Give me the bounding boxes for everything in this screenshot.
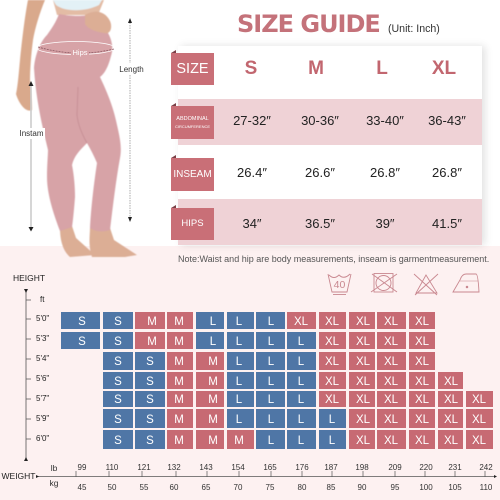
weight axis: 95 [391,483,400,492]
label: inseam [171,158,214,191]
unit note: (Unit: Inch) [388,23,440,35]
weight axis: 85 [327,483,336,492]
row 5'9": XL [444,414,459,426]
label: abdominal circumference: CIRCUMFERENCE [175,124,210,129]
hips measure [37,42,115,57]
row 6'0": XL [356,435,371,447]
height axis: 5'4" [36,354,49,363]
label: inseam: INSEAM [173,169,212,180]
row values: abdominal [233,113,466,128]
height axis [13,273,49,461]
weight axis: 165 [263,463,277,472]
weight axis: 242 [479,463,493,472]
row band: abdominal [178,99,482,145]
weight axis: 105 [448,483,462,492]
row 5'3": L [236,336,243,348]
row 5'9": L [236,414,243,426]
row 5'7": XL [472,394,487,406]
row 5'7": XL [325,394,340,406]
row 5'7": S [114,394,122,406]
row 5'0": XL [356,316,371,328]
row values: inseam: 26.4″ [237,165,267,180]
weight axis: 75 [266,483,275,492]
row 6'0": S [146,435,154,447]
row 5'9": M [174,414,184,426]
weight axis: 45 [78,483,87,492]
weight axis: 176 [295,463,309,472]
row 6'0": S [114,435,122,447]
weight axis: kg [50,478,59,488]
icon: iron [453,274,479,292]
label: hips: HIPS [181,218,204,229]
row 5'4": XL [384,356,399,368]
row 5'3": L [298,336,305,348]
row 5'6" [103,372,463,389]
row 5'7": XL [384,394,399,406]
hand [85,12,111,33]
label: size [171,53,214,85]
row 5'3": M [147,336,157,348]
row 5'4": XL [325,356,340,368]
height axis: 5'7" [36,394,49,403]
row 5'3": XL [415,336,430,348]
weight axis: 80 [298,483,307,492]
weight axis: 231 [448,463,462,472]
row 5'9": L [298,414,305,426]
row 5'0": L [268,316,275,328]
weight axis: 99 [78,463,87,472]
height axis: 5'9" [36,414,49,423]
row 6'0" [103,430,493,449]
icon: wash 40 [328,274,351,294]
row 5'9": S [146,414,154,426]
skin: torso [53,0,104,15]
size headers: L [376,58,388,79]
weight axis: 143 [199,463,213,472]
row 5'6": L [236,376,243,388]
size headers [245,58,456,79]
title: SIZE GUIDE [237,10,380,38]
row 5'4": XL [356,356,371,368]
row 5'6": M [208,376,218,388]
row 5'3": XL [384,336,399,348]
weight axis: 50 [108,483,117,492]
weight axis: 110 [480,483,493,492]
weight axis: 55 [140,483,149,492]
skin: arm [16,0,45,111]
row 5'9" [103,409,493,428]
row 6'0": M [208,435,218,447]
top [53,0,102,10]
row 5'7": L [236,394,243,406]
label: size: SIZE [176,61,209,77]
row 5'6": XL [415,376,430,388]
row 5'7": L [298,394,305,406]
row values: inseam: 26.6″ [305,165,335,180]
row 5'9": XL [472,414,487,426]
size headers: M [308,58,324,79]
row 5'6": L [298,376,305,388]
row 5'6": L [268,376,275,388]
size headers: S [245,58,257,79]
inseam arrow: Instam [19,129,44,138]
row 5'4": M [208,356,218,368]
row 5'7": XL [356,394,371,406]
height axis: 5'6" [36,374,49,383]
row 5'7": M [208,394,218,406]
size headers: XL [432,58,456,79]
row 5'3": L [268,336,275,348]
row 5'0": XL [384,316,399,328]
row 5'4": L [298,356,305,368]
row 5'0": L [236,316,243,328]
row 6'0": L [298,435,305,447]
row 5'9": XL [415,414,430,426]
row 5'4": L [236,356,243,368]
row 5'0": S [78,316,86,328]
weight axis: 65 [202,483,211,492]
row 5'7": L [268,394,275,406]
row 5'9": L [268,414,275,426]
weight axis: WEIGHT [2,471,36,481]
row 5'4": S [114,356,122,368]
row 5'7": XL [415,394,430,406]
row values: abdominal: 33-40″ [366,113,404,128]
row 5'4": L [268,356,275,368]
icon: do not bleach [414,274,438,295]
care note: Note:Waist and hip are body measurements, inseam is garmentmeasurement. [178,254,489,264]
weight axis: 187 [324,463,338,472]
row 5'4": XL [415,356,430,368]
row 5'3": XL [356,336,371,348]
row 5'6": S [146,376,154,388]
row values: hips: 41.5″ [432,216,462,231]
row 5'0": XL [415,316,430,328]
height axis: 6'0" [36,434,49,443]
row values: abdominal: 27-32″ [233,113,271,128]
row 5'3": L [210,336,217,348]
row values: inseam: 26.8″ [432,165,462,180]
row values: inseam [237,165,462,180]
height axis: 5'3" [36,334,49,343]
row 5'0" [61,312,435,329]
weight axis: 90 [358,483,367,492]
leggings [34,14,121,231]
row 5'7": XL [444,394,459,406]
row 5'7": M [174,394,184,406]
care icons [328,273,480,296]
weight axis: 154 [231,463,245,472]
row 6'0": M [174,435,184,447]
row 5'6": XL [444,376,459,388]
row 5'6": S [114,376,122,388]
height labels: ft [40,295,44,304]
row 5'7" [103,391,493,407]
row 5'9": L [329,414,336,426]
row 5'0": M [174,316,184,328]
row 5'0": M [147,316,157,328]
row values: hips [242,216,462,231]
row 5'3": XL [325,336,340,348]
bottom background panel [0,246,500,500]
row band: hips [178,199,482,245]
size table [178,46,482,245]
row 5'9": XL [356,414,371,426]
leg divider [77,87,87,143]
row 5'4": S [146,356,154,368]
row 6'0": XL [384,435,399,447]
row 6'0": L [268,435,275,447]
row 5'7": S [146,394,154,406]
hips measure: Hips [72,48,88,57]
height axis: 5'0" [36,314,49,323]
row 6'0": M [234,435,244,447]
row 6'0": XL [444,435,459,447]
label: abdominal circumference: ABDOMINAL [176,116,209,122]
weight axis: 132 [167,463,181,472]
weight axis: 209 [388,463,402,472]
row 5'3": S [114,336,122,348]
row 5'9": XL [384,414,399,426]
label: hips [171,208,214,240]
row 5'4": M [174,356,184,368]
weight axis [2,463,497,492]
weight axis: 100 [419,483,433,492]
weight axis: 121 [137,463,151,472]
row 5'6": XL [325,376,340,388]
row 6'0": XL [415,435,430,447]
figure: model wearing leggings with measurement lines [16,0,144,258]
row 5'4" [103,352,435,370]
height heading: HEIGHT [13,273,45,283]
weight axis: 70 [234,483,243,492]
row values: hips: 34″ [242,216,262,231]
weight axis: lb [51,463,58,473]
row values: abdominal: 36-43″ [428,113,466,128]
weight axis: 60 [170,483,179,492]
skin: feet [60,226,95,257]
row 5'6": XL [356,376,371,388]
row values: hips: 39″ [375,216,395,231]
label: abdominal circumference [171,106,214,139]
row 5'3": S [78,336,86,348]
row 6'0": XL [472,435,487,447]
row values: inseam: 26.8″ [370,165,400,180]
row 5'3": M [174,336,184,348]
icon: do not tumble dry [371,274,397,292]
row 5'0": S [114,316,122,328]
row 5'3" [61,332,435,349]
row 5'9": M [208,414,218,426]
length arrow [117,18,145,222]
length arrow: Length [119,65,144,74]
icon: wash 40: 40 [334,279,345,291]
row 5'0": L [210,316,217,328]
row values: abdominal: 30-36″ [301,113,339,128]
row 5'0": XL [325,316,340,328]
row 5'9": S [114,414,122,426]
row 5'6": XL [384,376,399,388]
row 5'6": M [174,376,184,388]
row 6'0": L [329,435,336,447]
label fold marks [171,50,176,208]
inseam arrow [18,81,45,232]
weight axis: 220 [419,463,433,472]
row values: hips: 36.5″ [305,216,335,231]
weight axis: 198 [355,463,369,472]
row 5'0": XL [294,316,309,328]
weight axis: 110 [106,463,119,472]
